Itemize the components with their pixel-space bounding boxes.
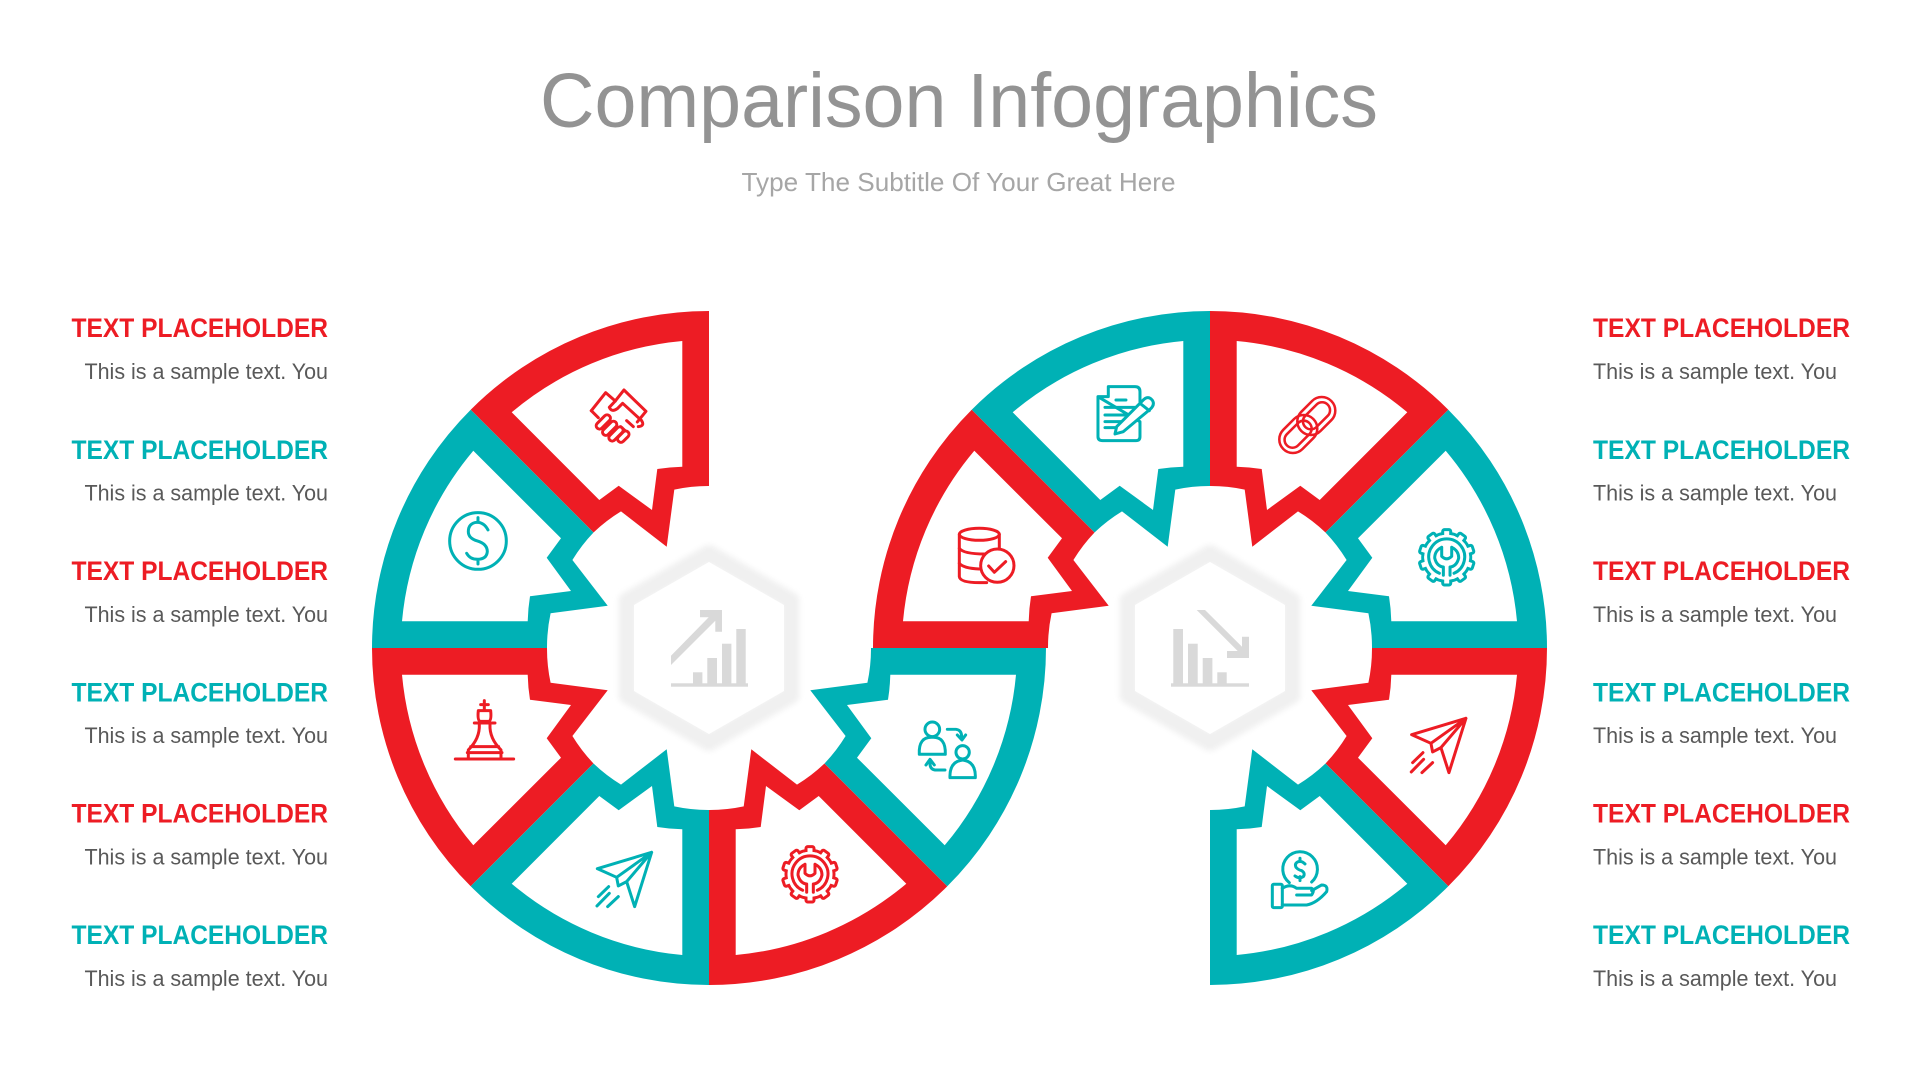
- icon: document pencil: [1098, 387, 1153, 441]
- left item 3: TEXT PLACEHOLDER: [72, 556, 328, 586]
- left item 5: TEXT PLACEHOLDER: [72, 798, 328, 828]
- left item 2: This is a sample text. You: [84, 480, 328, 506]
- segment: left wheel bottom-right red: [709, 749, 947, 985]
- segment: right wheel lower-right red: [1311, 648, 1547, 886]
- left item 4: [72, 678, 328, 748]
- segment: right wheel upper-right teal: [1311, 410, 1547, 648]
- left item 2: [72, 435, 328, 506]
- left item 5: This is a sample text. You: [84, 844, 328, 870]
- right item 1: This is a sample text. You: [1593, 359, 1837, 384]
- subtitle: Type The Subtitle Of Your Great Here: [742, 167, 1176, 197]
- icon: gear wrench red: [782, 847, 838, 902]
- right item 5: This is a sample text. You: [1593, 844, 1837, 870]
- segment: right wheel top-left teal: [972, 311, 1210, 547]
- right item 5: [1593, 798, 1850, 870]
- right item 3: TEXT PLACEHOLDER: [1593, 556, 1850, 586]
- left item 1: TEXT PLACEHOLDER: [72, 313, 328, 343]
- icon: paper plane teal: [597, 852, 652, 907]
- icon: database check: [959, 528, 1014, 583]
- icon: dollar coin: [450, 513, 506, 569]
- right item 2: This is a sample text. You: [1593, 480, 1837, 506]
- left item 4: TEXT PLACEHOLDER: [72, 678, 328, 708]
- segment: left wheel bottom-left teal: [471, 749, 709, 985]
- left item 2: TEXT PLACEHOLDER: [72, 435, 328, 465]
- right item 6: [1593, 920, 1850, 991]
- left text column: [72, 313, 328, 991]
- left item 6: [72, 920, 328, 991]
- icon: gear wrench teal: [1419, 530, 1474, 585]
- segment: right wheel upper-left red: [873, 410, 1109, 648]
- left item 6: TEXT PLACEHOLDER: [72, 920, 328, 950]
- right item 6: TEXT PLACEHOLDER: [1593, 920, 1850, 950]
- right item 1: [1593, 313, 1850, 384]
- right item 2: TEXT PLACEHOLDER: [1593, 435, 1850, 465]
- right item 1: TEXT PLACEHOLDER: [1593, 313, 1850, 343]
- segment: left wheel lower-left red: [372, 648, 608, 886]
- right item 6: This is a sample text. You: [1593, 966, 1837, 991]
- segment: left wheel top red: [471, 311, 709, 547]
- left item 5: [72, 798, 328, 870]
- right item 5: TEXT PLACEHOLDER: [1593, 798, 1850, 828]
- icon: people exchange: [919, 722, 975, 778]
- icon: hand with coin: [1272, 852, 1327, 908]
- icon: chain link: [1274, 391, 1341, 459]
- left item 1: This is a sample text. You: [84, 359, 328, 384]
- right wheel: [873, 311, 1547, 985]
- segment: left wheel lower-right teal: [810, 648, 1046, 886]
- right item 4: [1593, 678, 1850, 748]
- right item 4: TEXT PLACEHOLDER: [1593, 678, 1850, 708]
- left item 1: [72, 313, 328, 384]
- right item 4: This is a sample text. You: [1593, 723, 1837, 748]
- right item 3: This is a sample text. You: [1593, 602, 1837, 627]
- icon: chess king: [455, 701, 514, 759]
- left wheel: [372, 311, 1046, 985]
- icon: paper plane red: [1411, 718, 1466, 773]
- right text column: [1593, 313, 1850, 991]
- hexagon: decline chart: [1128, 554, 1292, 742]
- title: Comparison Infographics: [540, 58, 1378, 144]
- right item 2: [1593, 435, 1850, 506]
- left item 3: This is a sample text. You: [84, 602, 328, 627]
- left item 4: This is a sample text. You: [84, 723, 328, 748]
- segment: left wheel upper-left teal: [372, 410, 608, 648]
- right item 3: [1593, 556, 1850, 627]
- segment: right wheel bottom-right teal: [1210, 749, 1448, 985]
- left item 6: This is a sample text. You: [84, 966, 328, 991]
- hexagon: growth chart: [628, 554, 790, 742]
- left item 3: [72, 556, 328, 627]
- segment: right wheel top-right red: [1210, 311, 1448, 547]
- icon: handshake: [591, 390, 646, 444]
